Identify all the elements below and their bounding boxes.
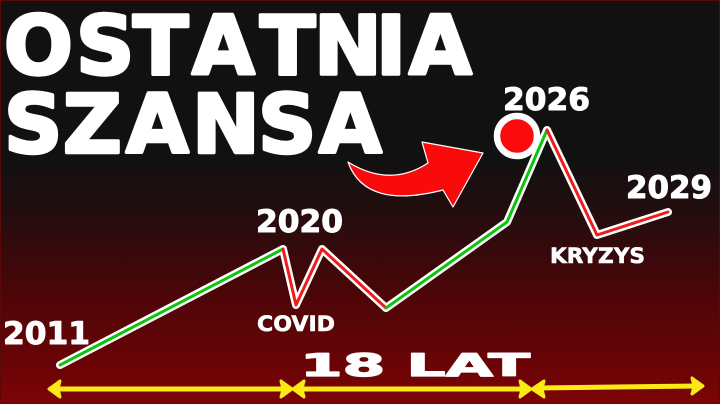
label: 2020: 2020 — [256, 204, 343, 240]
title: OSTATNIA — [4, 0, 472, 94]
label: 2011: 2011 — [3, 316, 90, 352]
label: 18 LAT: 18 LAT — [300, 348, 530, 384]
rising segment: to 2026 peak — [386, 130, 547, 308]
arrow: 2011 to 2020 — [49, 381, 292, 397]
line chart: price path — [60, 130, 668, 365]
title: SZANSA — [4, 78, 382, 172]
arrow: 2026 to 2029 — [532, 378, 703, 397]
falling segment: covid dip — [283, 249, 386, 308]
label: 2026: 2026 — [503, 82, 590, 118]
rising segment: 2011 to 2020 — [60, 249, 283, 365]
falling segment: crisis to 2029 — [547, 130, 668, 235]
label: KRYZYS: KRYZYS — [550, 244, 645, 268]
title — [4, 0, 472, 172]
icon: red circle marker — [497, 116, 537, 156]
label: COVID: COVID — [257, 312, 335, 336]
label: 2029: 2029 — [626, 170, 712, 206]
icon: curved red arrow — [348, 142, 483, 207]
arrow: 2020 to 2026 — [293, 381, 531, 397]
timeline arrows — [49, 378, 703, 397]
